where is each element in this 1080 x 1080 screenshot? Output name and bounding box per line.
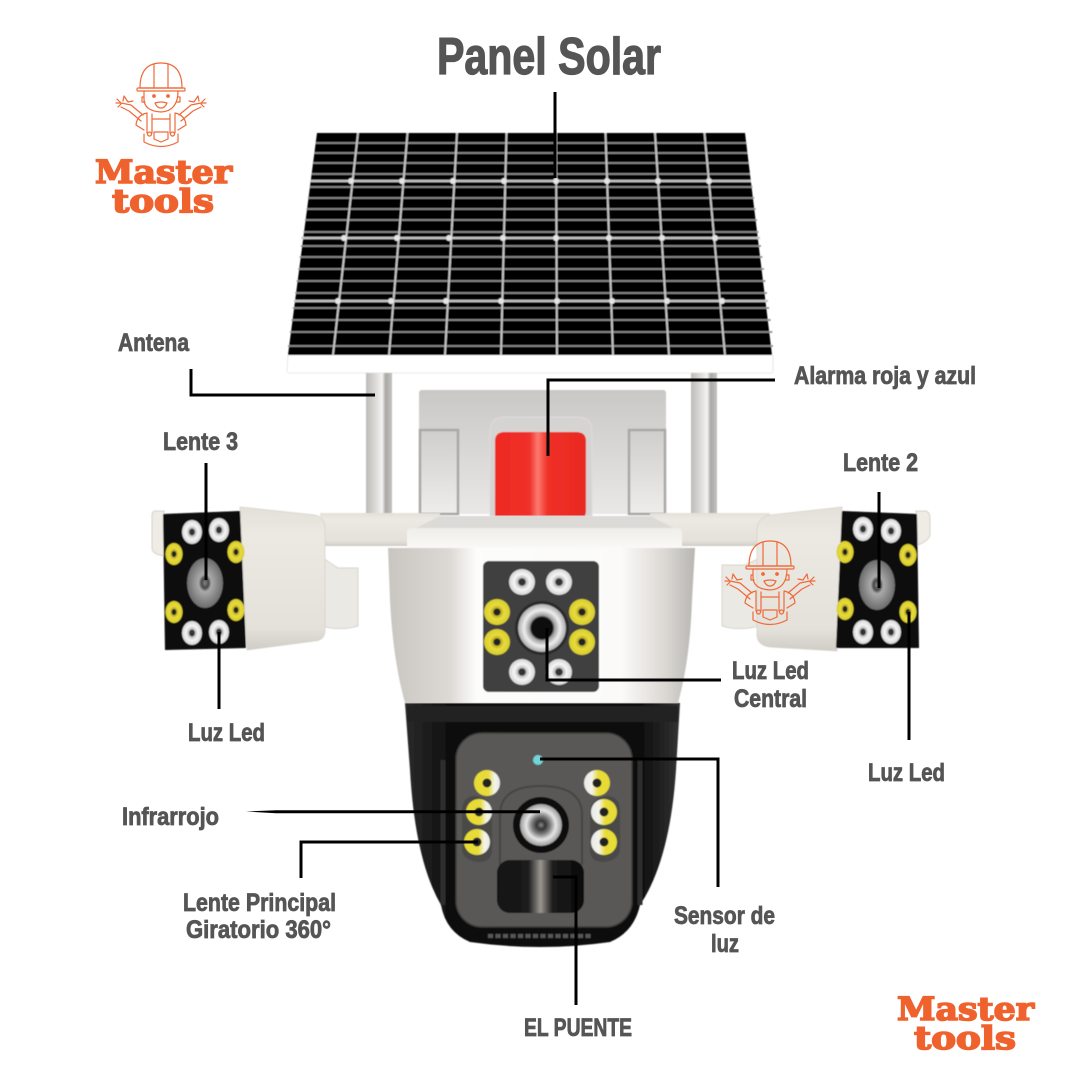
central LEDs xyxy=(484,569,595,685)
left camera body xyxy=(240,507,325,650)
red alarm siren xyxy=(490,417,592,516)
logo: bottom-right Master tools xyxy=(897,990,1035,1057)
back plate xyxy=(419,390,666,514)
dome inner side lines xyxy=(443,760,640,905)
line: Lente Principal xyxy=(301,842,478,878)
label: Sensor de luz: Sensor de xyxy=(674,902,775,930)
central lens xyxy=(515,601,569,655)
callout lines xyxy=(191,92,909,1005)
housing body xyxy=(388,548,695,703)
right mount bracket xyxy=(722,558,760,629)
label: Lente Principal Giratorio 360: Lente Principal xyxy=(183,889,336,917)
housing rim xyxy=(407,528,682,548)
line: Alarma xyxy=(548,380,775,456)
label: Lente 3: Lente 3 xyxy=(163,428,238,456)
logo: bottom-right Master tools: tools xyxy=(914,1019,1016,1057)
label: Sensor de luz xyxy=(674,902,775,958)
left lens xyxy=(187,558,223,608)
black dome camera xyxy=(405,703,680,947)
dome LEDs xyxy=(464,770,617,855)
left LEDs xyxy=(166,518,244,645)
line: Antena xyxy=(191,369,375,395)
right camera body xyxy=(757,507,842,651)
central LED panel xyxy=(483,561,599,692)
line: Lente 2 xyxy=(878,492,880,588)
dome camera face plate xyxy=(456,733,632,927)
lens arch xyxy=(500,786,582,865)
labels xyxy=(118,329,976,1042)
light sensor xyxy=(533,755,543,765)
line: Luz Led left xyxy=(218,632,220,709)
label: Antena: Antena xyxy=(118,329,190,357)
bottom vent dots xyxy=(488,934,593,938)
label: Luz Led left: Luz Led xyxy=(188,719,265,747)
spotlight window xyxy=(497,860,584,913)
label: Luz Led right: Luz Led xyxy=(868,759,945,787)
label: Luz Led Central: Central xyxy=(734,685,807,713)
right LEDs xyxy=(836,517,916,644)
heading: Panel Solar: Panel Solar xyxy=(437,28,661,86)
left hood xyxy=(152,511,164,556)
right arm xyxy=(650,513,770,546)
solar panel xyxy=(287,133,773,373)
panel frame xyxy=(287,355,773,373)
line: Lente 3 xyxy=(204,463,208,580)
label: Luz Led Central xyxy=(732,657,809,713)
label: Lente Principal Giratorio 360 xyxy=(183,889,336,944)
left camera face xyxy=(163,511,246,650)
line: Infrarrojo xyxy=(246,810,540,813)
label: Alarma roja y azul: Alarma roja y azul xyxy=(794,362,976,390)
left LED pod xyxy=(462,796,492,862)
icon: worker mascot xyxy=(116,63,206,146)
dome shoulder highlight xyxy=(407,706,678,722)
left arm xyxy=(320,513,440,546)
left side camera xyxy=(152,507,440,650)
main lens xyxy=(513,797,569,853)
right hood xyxy=(916,511,930,545)
panel cells xyxy=(288,133,772,355)
line: Panel Solar xyxy=(554,92,556,178)
logo: bottom-right Master tools: Master xyxy=(897,990,1035,1028)
label: Infrarrojo: Infrarrojo xyxy=(122,803,219,831)
line: Luz Led right xyxy=(908,612,910,740)
label: Luz Led Central: Luz Led xyxy=(732,657,809,685)
right camera face xyxy=(836,511,919,648)
housing top cone xyxy=(408,516,682,532)
right side camera xyxy=(650,507,930,651)
right LED pod xyxy=(590,796,620,862)
dome shell xyxy=(405,703,680,947)
label: Lente 2: Lente 2 xyxy=(843,449,918,477)
line: Luz Led Central xyxy=(547,628,721,680)
label: EL PUENTE: EL PUENTE xyxy=(524,1014,632,1042)
right lens xyxy=(859,560,895,610)
label: Lente Principal Giratorio 360: Giratorio 360° xyxy=(186,916,331,944)
support poles xyxy=(366,373,717,516)
small mascot over right camera xyxy=(725,541,815,624)
left mount bracket xyxy=(323,558,358,629)
logo: top-left Master tools xyxy=(95,63,233,220)
label: Sensor de luz: luz xyxy=(711,930,739,958)
line: El Puente xyxy=(553,877,576,1005)
logo text: Master: Master xyxy=(95,153,233,191)
logo text: tools: tools xyxy=(112,182,214,220)
line: Sensor de luz xyxy=(540,759,718,887)
central white housing xyxy=(388,516,695,703)
